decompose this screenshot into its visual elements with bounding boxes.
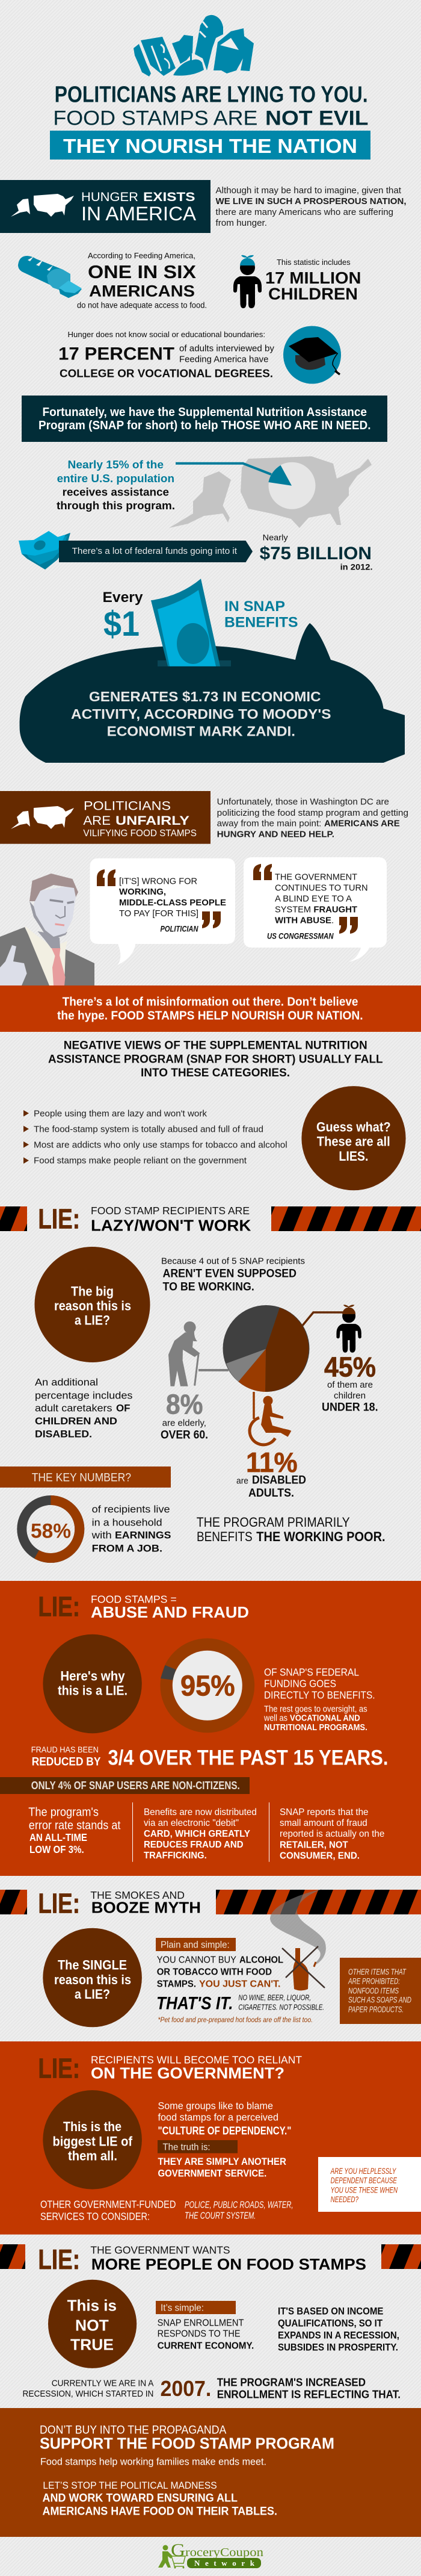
stat: 75 billion: $75 BILLION [260, 544, 372, 563]
heading: FOOD STAMPS = [91, 1593, 177, 1605]
text: cannot buy alcohol [156, 1955, 324, 2024]
key number label [0, 1466, 171, 1488]
panel: lie lazy won't work [0, 1203, 421, 1558]
text: recipients with earnings [91, 1504, 171, 1554]
SNAP callout [22, 396, 387, 442]
text: stop the political madness: AND WORK TOWARD ENSURING ALL [42, 2492, 238, 2504]
icon: groceries [134, 15, 254, 76]
SNAP callout: Program (SNAP for short) to help THOSE WHO ARE IN NEED. [38, 418, 370, 432]
circle callout: big reason: The big [71, 1284, 114, 1299]
text: support the program: SUPPORT THE FOOD STAMP PROGRAM [40, 2435, 334, 2452]
section banner: POLITICIANS [84, 799, 171, 813]
speech bubble: congressman quote: FRAUGHT [313, 905, 357, 915]
text: other government services [40, 2199, 293, 2223]
stat: 75 billion: in 2012. [340, 562, 373, 572]
text: other government services: SERVICES TO CONSIDER: [40, 2211, 150, 2223]
text: federal funding: well as [263, 1714, 287, 1724]
stat: 17 million children [265, 258, 361, 303]
circle callout: not true: This is [67, 2297, 117, 2315]
text: income qualifications: SUBSIDES IN PROSPERITY. [278, 2341, 398, 2353]
misinformation banner [0, 985, 421, 1032]
speech bubble: congressman quote: THE GOVERNMENT [275, 872, 357, 883]
box: helplessly dependent: NEEDED? [331, 2194, 358, 2204]
hazard strip heading [0, 1203, 421, 1235]
circle callout: big reason [35, 1247, 150, 1362]
stat: 15 percent of population: receives assistance [63, 485, 169, 498]
column: retailer fraud: RETAILER, NOT [280, 1840, 348, 1851]
text: caretakers: An additional [35, 1377, 98, 1388]
panel: lie reliance on government [0, 2041, 421, 2235]
text: recession since 2007 [23, 2376, 401, 2401]
text: federal funding: OF SNAP'S FEDERAL [264, 1666, 359, 1678]
every dollar text: BENEFITS [224, 615, 298, 631]
stat: 15 percent of population: entire U.S. population [57, 472, 174, 485]
hazard strip heading [0, 2244, 421, 2275]
text: federal funding: NUTRITIONAL PROGRAMS. [264, 1723, 367, 1733]
section banner: IN AMERICA [81, 203, 197, 225]
stat: fraud reduced: FRAUD HAS BEEN [31, 1745, 99, 1754]
column: retailer fraud: reported is actually on the [280, 1829, 384, 1839]
paragraph: away from the main point: [217, 819, 321, 829]
bullet list: Food stamps make people reliant on the government [34, 1155, 247, 1165]
speech bubble: congressman quote [244, 857, 387, 962]
text: stop the political madness: LET’S STOP THE POLITICAL MADNESS [43, 2480, 217, 2491]
stat: fraud reduced: 3/4 OVER THE PAST 15 YEARS. [108, 1746, 389, 1770]
paragraph: AMERICANS ARE [324, 819, 400, 829]
text: recipients with earnings: in a household [92, 1517, 162, 1529]
subtitle banner: THEY NOURISH THE NATION [63, 135, 357, 157]
truth label [158, 2140, 238, 2153]
column: retailer fraud [280, 1807, 384, 1861]
title: NOT EVIL [265, 107, 368, 129]
stat: 45 percent [322, 1352, 378, 1414]
stat: fraud reduced: REDUCED BY [32, 1755, 101, 1768]
hazard strip heading: BOOZE MYTH [91, 1899, 201, 1917]
text: federal funding: FUNDING GOES [264, 1678, 336, 1690]
piggy bank [20, 579, 405, 763]
stat: one in six [77, 251, 207, 310]
column: debit card: via an electronic "debit" [144, 1818, 239, 1828]
key number label: THE KEY NUMBER? [32, 1472, 131, 1485]
box: other prohibited items: ARE PROHIBITED: [348, 1976, 400, 1986]
heading [38, 2052, 302, 2084]
pie chart [223, 1305, 309, 1392]
stat: 11 percent [236, 1447, 306, 1500]
text: working poor: THE PROGRAM PRIMARILY [197, 1515, 350, 1530]
text: federal funding: VOCATIONAL AND [290, 1714, 360, 1724]
text: income qualifications: IT'S BASED ON INCOME [278, 2305, 384, 2317]
text: cannot buy alcohol: NO WINE, BEER, LIQUOR, [238, 1993, 311, 2002]
stat: 45 percent: 45% [324, 1352, 376, 1383]
section banner: EXISTS [143, 190, 195, 204]
text: recession since 2007: RECESSION, WHICH STARTED IN [23, 2389, 153, 2399]
text: caretakers: OF [116, 1403, 130, 1414]
every dollar text: Every [102, 589, 143, 606]
donut chart: 95 percent [160, 1638, 254, 1733]
column: debit card [144, 1807, 257, 1861]
piggy bank text: ACTIVITY, ACCORDING TO MOODY'S [71, 706, 331, 722]
text: recipients with earnings: EARNINGS [115, 1530, 171, 1541]
stat: 75 billion [260, 533, 373, 572]
paragraph [217, 797, 408, 840]
non-citizens strip [0, 1777, 250, 1794]
stat: 15 percent of population: through this program. [57, 499, 175, 512]
stat: 17 percent: Feeding America have [179, 355, 268, 365]
speech bubble: congressman quote: US CONGRESSMAN [267, 931, 334, 940]
text: other government services: POLICE, PUBLIC ROADS, WATER, [185, 2200, 293, 2211]
text: stop the political madness: AMERICANS HAVE FOOD ON THEIR TABLES. [42, 2505, 277, 2518]
SNAP callout: Fortunately, we have the Supplemental Nutrition Assistance [42, 405, 367, 419]
hazard strip heading [0, 1888, 421, 1919]
speech bubble: congressman quote: . [331, 916, 334, 926]
text: not supposed to be working [161, 1256, 305, 1293]
section banner [0, 180, 210, 233]
circle callout: biggest lie [43, 2090, 142, 2190]
column: retailer fraud: SNAP reports that the [280, 1807, 369, 1817]
stat: 45 percent: of them are [327, 1380, 373, 1390]
negative views heading: ASSISTANCE PROGRAM (SNAP FOR SHORT) USUALLY FALL [48, 1052, 383, 1066]
stat: 8 percent [161, 1389, 208, 1441]
map with pie chart [169, 456, 372, 528]
text: federal funding: DIRECTLY TO BENEFITS. [264, 1689, 375, 1701]
illustration: politician [0, 874, 94, 985]
donut chart: 95 percent: 95% [180, 1671, 235, 1702]
paragraph: politicizing the food stamp program and getting [217, 808, 408, 818]
federal funds banner [59, 541, 253, 562]
speech bubble: politician quote [90, 858, 235, 965]
circle callout: big reason: reason this is [54, 1299, 131, 1314]
stat: 8 percent: are elderly, [162, 1418, 206, 1429]
piggy bank text [71, 689, 331, 739]
stat: 75 billion: Nearly [263, 533, 288, 542]
stat: one in six: ONE IN SIX [88, 262, 197, 282]
text: caretakers: CHILDREN AND [35, 1415, 117, 1427]
heading: ON THE GOVERNMENT? [91, 2064, 284, 2082]
speech bubble: politician quote: POLITICIAN [160, 924, 198, 934]
stat: 17 percent: of adults interviewed by [179, 343, 274, 353]
text: not supposed to be working: AREN'T EVEN SUPPOSED [162, 1268, 297, 1280]
speech bubble: congressman quote: SYSTEM [275, 905, 311, 915]
text: working poor: BENEFITS [197, 1529, 253, 1544]
text: caretakers [35, 1377, 132, 1439]
text: culture of dependency [158, 2100, 291, 2137]
panel: more people on food stamps [0, 2244, 421, 2401]
stat: 15 percent of population: Nearly 15% of the [67, 458, 164, 471]
icon: graduation cap [283, 326, 341, 384]
speech bubble: politician quote: TO PAY [FOR THIS] [119, 908, 198, 919]
intro paragraph: WE LIVE IN SUCH A PROSPEROUS NATION, [215, 196, 407, 206]
text: SNAP enrollment: SNAP ENROLLMENT [158, 2318, 244, 2328]
panel: call to action [0, 2408, 421, 2537]
text: another government service [158, 2156, 286, 2179]
text: recession since 2007: ENROLLMENT IS REFLECTING THAT. [217, 2388, 401, 2400]
paragraph: HUNGRY AND NEED HELP. [217, 830, 334, 840]
text: another government service: THEY ARE SIMPLY ANOTHER [158, 2156, 286, 2167]
intro paragraph: there are many Americans who are suffering [215, 207, 393, 217]
misinformation banner: the hype. FOOD STAMPS HELP NOURISH OUR NATION. [57, 1009, 363, 1022]
text: not supposed to be working: TO BE WORKING. [162, 1280, 254, 1293]
box: helplessly dependent: ARE YOU HELPLESSLY [330, 2166, 397, 2176]
icon: child [233, 255, 262, 308]
circle callout: single reason: reason this is [54, 1972, 131, 1987]
subtitle banner [50, 131, 370, 160]
text: caretakers: adult caretakers [35, 1403, 112, 1414]
hazard strip heading: LIE: [38, 1203, 80, 1235]
title: POLITICIANS ARE LYING TO YOU. [55, 82, 368, 107]
non-citizens strip: ONLY 4% OF SNAP USERS ARE NON-CITIZENS. [31, 1780, 240, 1792]
heading: RECIPIENTS WILL BECOME TOO RELIANT [91, 2054, 302, 2066]
circle callout: single reason: a LIE? [75, 1987, 110, 2002]
stat: 11 percent: DISABLED [252, 1474, 306, 1486]
stat: 17 percent: COLLEGE OR VOCATIONAL DEGREES. [60, 367, 273, 380]
text: recession since 2007: CURRENTLY WE ARE IN A [52, 2379, 154, 2389]
circle callout: biggest lie: This is the [63, 2119, 121, 2134]
dollar bill [151, 579, 220, 666]
illustration: smoke [270, 1889, 326, 1965]
stat: 8 percent: 8% [166, 1389, 203, 1420]
circle callout: not true: TRUE [70, 2335, 114, 2353]
shopper icon [158, 2545, 185, 2568]
circle callout: not true: NOT [75, 2316, 109, 2334]
column: error rate [28, 1806, 121, 1855]
text: other government services: THE COURT SYSTEM. [185, 2211, 256, 2221]
stat: 17 percent: 17 PERCENT [58, 344, 174, 364]
panel: smokes and booze myth [0, 1888, 421, 2027]
stat: one in six: AMERICANS [89, 282, 195, 300]
text: culture of dependency: food stamps for a perceived [158, 2112, 278, 2123]
text: recipients with earnings: with [91, 1530, 112, 1541]
every dollar text: $1 [103, 604, 140, 644]
circle callout: biggest lie: them all. [68, 2149, 117, 2164]
text: recession since 2007: THE PROGRAM'S INCREASED [217, 2376, 366, 2388]
donut chart: 58 percent [22, 1500, 79, 1558]
column: retailer fraud: small amount of fraud [280, 1818, 367, 1828]
text: support the program [40, 2423, 334, 2467]
connector lines [198, 1312, 346, 1419]
stat: 15 percent of population [57, 458, 175, 512]
piggy bank text: GENERATES $1.73 IN ECONOMIC [89, 689, 321, 704]
hazard strip heading: LAZY/WON'T WORK [91, 1217, 251, 1235]
title: FOOD STAMPS ARE [53, 107, 257, 129]
text: culture of dependency: Some groups like to blame [158, 2100, 273, 2111]
column: retailer fraud: CONSUMER, END. [280, 1851, 360, 1861]
column: error rate: error rate stands at [29, 1819, 121, 1832]
text: another government service: GOVERNMENT SERVICE. [158, 2168, 266, 2179]
logo wordmark: G [171, 2540, 185, 2560]
logo wordmark [171, 2540, 263, 2568]
text: cannot buy alcohol: YOU CANNOT BUY [157, 1955, 236, 1966]
speech bubble: congressman quote: WITH ABUSE [275, 916, 331, 926]
stat: 8 percent: OVER 60. [161, 1429, 208, 1441]
negative views heading: NEGATIVE VIEWS OF THE SUPPLEMENTAL NUTRITION [64, 1038, 367, 1052]
column: debit card: Benefits are now distributed [144, 1807, 257, 1817]
hazard strip heading: MORE PEOPLE ON FOOD STAMPS [91, 2255, 366, 2273]
circle callout: guess what: Guess what? [316, 1119, 391, 1134]
section banner [0, 791, 210, 844]
column: debit card: TRAFFICKING. [144, 1851, 207, 1861]
box: other prohibited items: NONFOOD ITEMS [348, 1985, 399, 1995]
hazard strip heading: FOOD STAMP RECIPIENTS ARE [91, 1205, 250, 1217]
section banner: UNFAIRLY [115, 814, 189, 828]
section banner: HUNGER [81, 190, 138, 204]
panel: header [50, 15, 370, 160]
panel: hunger exists in America [0, 180, 407, 763]
text: culture of dependency: "CULTURE OF DEPENDENCY." [158, 2124, 291, 2137]
text: income qualifications: QUALIFICATIONS, SO IT [278, 2317, 383, 2329]
circle callout: guess what: These are all [317, 1134, 390, 1149]
bullet list [23, 1108, 287, 1165]
icon: elderly person [168, 1321, 200, 1386]
speech bubble: politician quote: [IT'S] WRONG FOR [119, 876, 197, 886]
bullet list: The food-stamp system is totally abused and full of fraud [34, 1124, 263, 1134]
logo wordmark: Network [194, 2559, 255, 2568]
circle callout: guess what [301, 1086, 406, 1190]
column: error rate: The program's [28, 1806, 99, 1819]
text: recession since 2007: 2007. [160, 2376, 211, 2401]
column: debit card: REDUCES FRAUD AND [144, 1840, 243, 1850]
heading: ABUSE AND FRAUD [91, 1603, 249, 1621]
text: federal funding [263, 1666, 375, 1733]
text: income qualifications: EXPANDS IN A RECESSION, [278, 2329, 399, 2341]
bullet list: Most are addicts who only use stamps for tobacco and alcohol [34, 1140, 287, 1150]
stat: one in six: According to Feeding America, [88, 251, 195, 260]
box: other prohibited items [340, 1958, 421, 2024]
panel: politicians unfairly vilifying [0, 791, 421, 1190]
negative views heading [48, 1038, 383, 1079]
section banner: ARE [83, 814, 111, 828]
speech bubble: congressman quote: A BLIND EYE TO A [275, 894, 352, 904]
donut chart: 58 percent: 58% [31, 1519, 71, 1542]
text: cannot buy alcohol: CIGARETTES. NOT POSSIBLE. [238, 2002, 324, 2011]
hazard strip heading: THE GOVERNMENT WANTS [90, 2244, 230, 2256]
text: cannot buy alcohol: YOU JUST CAN'T. [199, 1979, 280, 1990]
stat: 11 percent: 11% [246, 1447, 298, 1478]
intro paragraph [215, 185, 407, 228]
text: cannot buy alcohol: ALCOHOL [239, 1955, 283, 1966]
circle callout: single reason [43, 1928, 142, 2027]
hazard strip heading: LIE: [38, 1888, 80, 1919]
circle callout: guess what: LIES. [339, 1149, 368, 1164]
stat: 17 million children: This statistic includes [277, 258, 351, 267]
text: recipients with earnings: FROM A JOB. [92, 1542, 162, 1554]
misinformation banner: There’s a lot of misinformation out there. Don’t believe [63, 996, 358, 1009]
intro paragraph: Although it may be hard to imagine, given that [215, 185, 402, 196]
text: stop the political madness [42, 2480, 277, 2518]
intro paragraph: from hunger. [215, 218, 267, 228]
icon: money [19, 531, 70, 570]
simple label [156, 2301, 236, 2314]
circle callout: here's why: Here's why [60, 1669, 125, 1684]
heading [38, 1591, 249, 1622]
circle callout: big reason: a LIE? [75, 1313, 110, 1328]
plain and simple label [156, 1938, 236, 1951]
text: SNAP enrollment: RESPONDS TO THE [158, 2329, 241, 2339]
title [53, 82, 368, 129]
text: SNAP enrollment [158, 2318, 254, 2351]
every dollar text: IN SNAP [224, 598, 285, 615]
stat: 17 million children: 17 MILLION [265, 268, 361, 287]
section banner: VILIFYING FOOD STAMPS [83, 828, 197, 839]
icon: child [336, 1305, 361, 1353]
plain and simple label: Plain and simple: [161, 1940, 230, 1951]
panel: lie abuse and fraud [0, 1581, 421, 1876]
text: cannot buy alcohol: *Pet food and pre-prepared hot foods are off the list too. [158, 2016, 313, 2024]
text: cannot buy alcohol: THAT'S IT. [156, 1993, 233, 2013]
piggy bank text: ECONOMIST MARK ZANDI. [107, 724, 295, 739]
text: SNAP enrollment: CURRENT ECONOMY. [158, 2341, 254, 2351]
text: cannot buy alcohol: STAMPS. [157, 1979, 196, 1990]
speech bubble: politician quote: MIDDLE-CLASS PEOPLE [119, 898, 226, 908]
text: caretakers: percentage includes [35, 1389, 132, 1401]
hazard strip heading: THE SMOKES AND [90, 1889, 185, 1901]
truth label: The truth is: [162, 2143, 210, 2153]
stat: one in six: do not have adequate access to food. [77, 301, 207, 310]
circle callout: single reason: The SINGLE [58, 1958, 127, 1973]
simple label: It’s simple: [161, 2303, 204, 2314]
text: working poor [197, 1515, 386, 1544]
icon: wheelchair [250, 1396, 291, 1445]
column: error rate: LOW OF 3%. [29, 1843, 84, 1855]
stat: fraud reduced [31, 1745, 389, 1770]
stat: 11 percent: ADULTS. [248, 1487, 294, 1500]
paragraph: Unfortunately, those in Washington DC are [217, 797, 389, 807]
every dollar text [102, 589, 298, 644]
negative views heading: INTO THESE CATEGORIES. [141, 1066, 290, 1079]
text: federal funding: The rest goes to oversight, as [264, 1704, 367, 1714]
logo: Grocery Coupon Network [158, 2540, 263, 2568]
column: error rate: AN ALL-TIME [29, 1831, 87, 1843]
text: income qualifications [278, 2305, 399, 2353]
stat: 11 percent: are [236, 1476, 248, 1486]
stat: 17 million children: CHILDREN [268, 285, 358, 303]
logo wordmark: roceryCoupon [185, 2546, 263, 2559]
stat: 17 percent [58, 330, 274, 380]
stat: 45 percent: children [334, 1391, 366, 1401]
hazard strip heading: LIE: [38, 2244, 80, 2275]
text: not supposed to be working: Because 4 out of 5 SNAP recipients [161, 1256, 305, 1266]
text: cannot buy alcohol: OR TOBACCO WITH FOOD [157, 1967, 272, 1978]
text: support the program: Food stamps help working families make ends meet. [40, 2456, 266, 2467]
speech bubble: politician quote: WORKING, [119, 887, 166, 897]
heading: LIE: [38, 1591, 80, 1622]
federal funds banner: There’s a lot of federal funds going into it [72, 547, 237, 556]
text: other government services: OTHER GOVERNMENT-FUNDED [40, 2199, 176, 2211]
box: helplessly dependent [318, 2157, 421, 2212]
circle callout: not true [48, 2280, 137, 2368]
heading: LIE: [38, 2052, 80, 2084]
bullet list: People using them are lazy and won't work [34, 1108, 207, 1119]
text: support the program: DON’T BUY INTO THE PROPAGANDA [40, 2423, 226, 2436]
circle callout: biggest lie: biggest LIE of [53, 2134, 133, 2149]
text: recipients with earnings: of recipients live [92, 1504, 170, 1515]
text: caretakers: DISABLED. [35, 1428, 92, 1439]
stat: 45 percent: UNDER 18. [322, 1401, 378, 1414]
illustration: crossed-out bottle and cigarette [282, 1946, 325, 1990]
circle callout: here's why: this is a LIE. [58, 1683, 128, 1698]
speech bubble: congressman quote: CONTINUES TO TURN [275, 883, 368, 893]
icon: bread loaf [18, 256, 82, 298]
stat: 17 percent: Hunger does not know social or educational boundaries: [67, 330, 265, 339]
circle callout: here's why [43, 1634, 142, 1733]
text: working poor: THE WORKING POOR. [256, 1529, 386, 1544]
column: debit card: CARD, WHICH GREATLY [144, 1829, 250, 1839]
